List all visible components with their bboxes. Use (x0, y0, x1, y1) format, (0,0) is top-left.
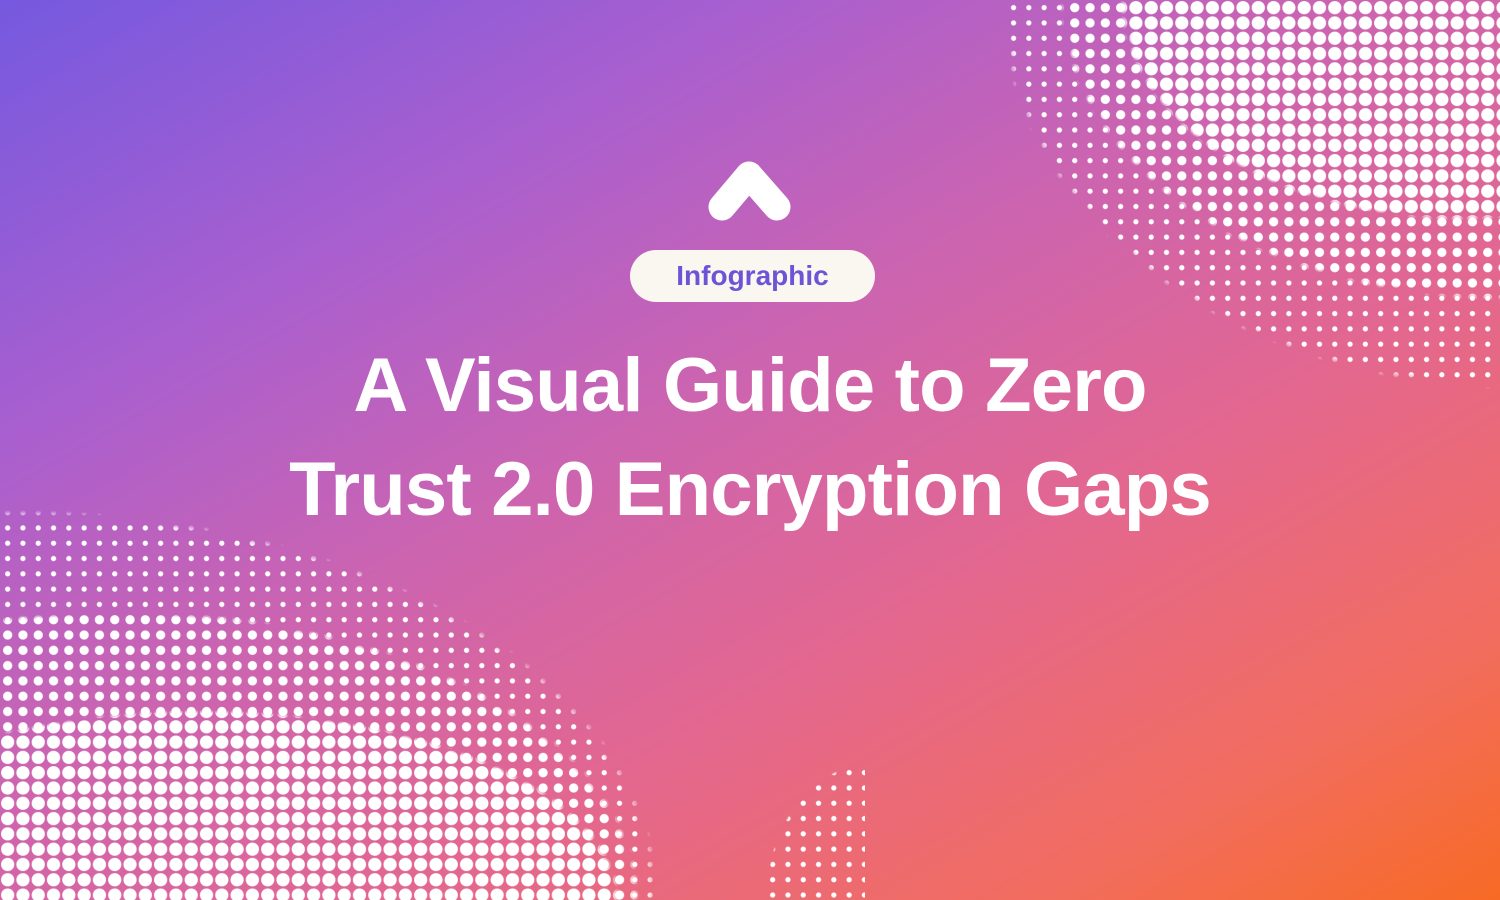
dot pattern: bottom left (1, 510, 653, 900)
dot pattern: top right (1010, 1, 1500, 389)
badge: Infographic (630, 250, 875, 302)
title: Trust 2.0 Encryption Gaps (289, 447, 1211, 532)
badge: Infographic: Infographic (676, 260, 829, 291)
title (289, 343, 1211, 532)
dot pattern: bottom center (765, 765, 865, 900)
title: A Visual Guide to Zero (353, 343, 1147, 428)
icon: logo caret (708, 162, 790, 220)
